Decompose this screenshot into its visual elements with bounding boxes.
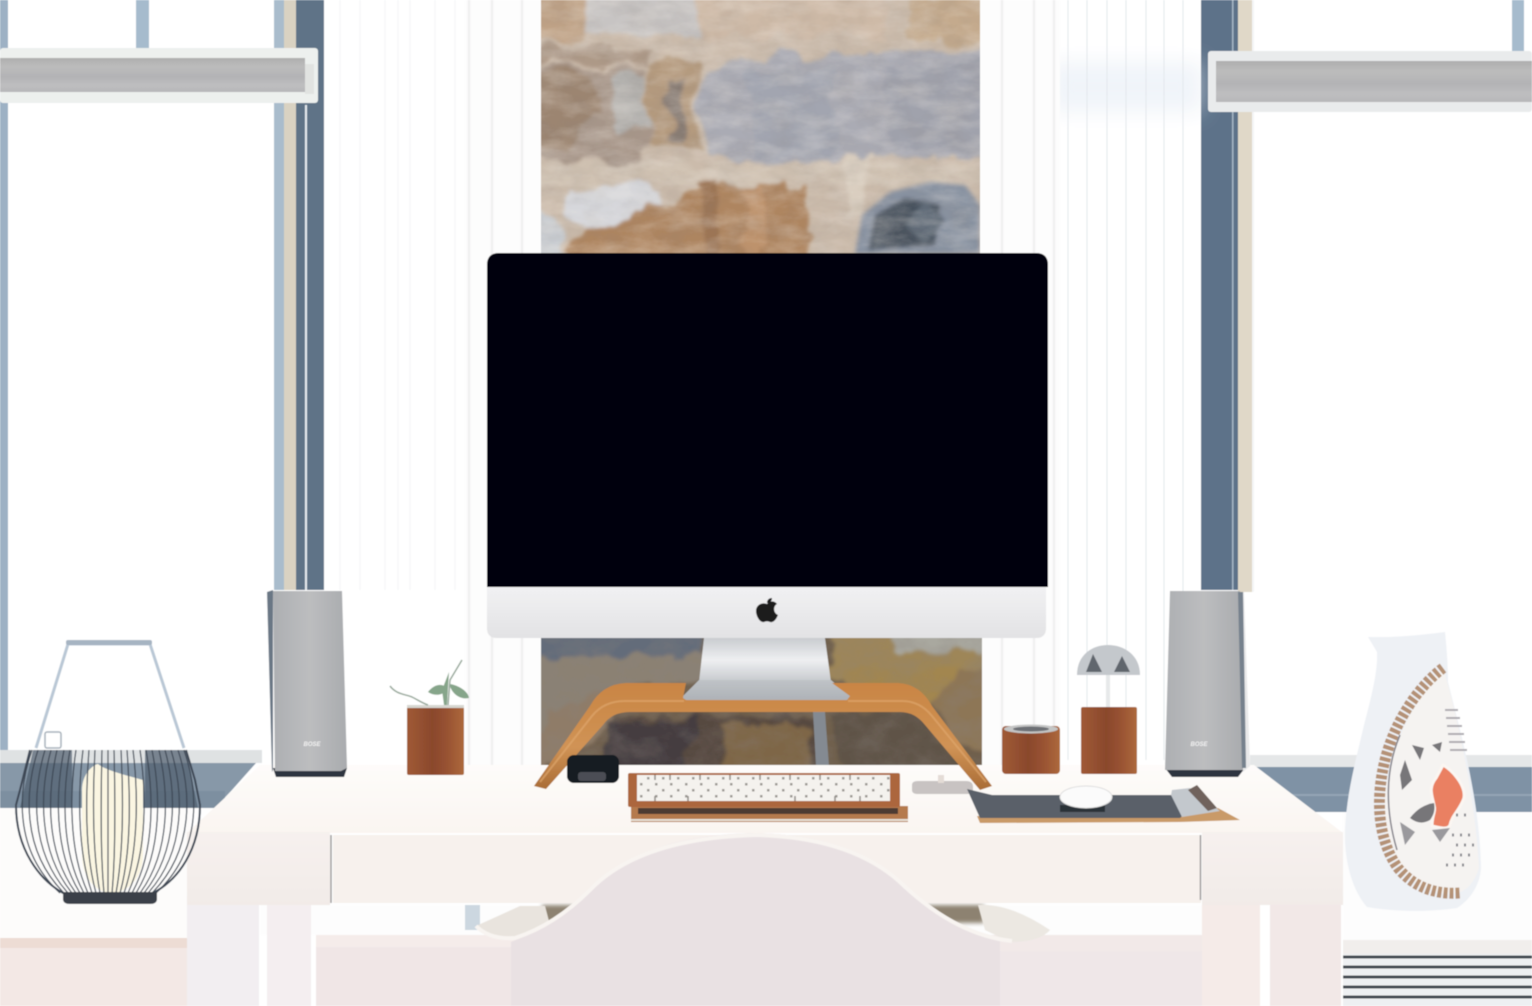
right speaker [1165, 591, 1250, 777]
chair right arm underside [978, 905, 1050, 942]
chair left arm underside [476, 906, 550, 938]
dark band seen through the cage [20, 750, 198, 808]
lantern glass outline [36, 644, 184, 748]
left roller blind [0, 48, 318, 103]
pen clip [1171, 788, 1220, 817]
wooden monitor riser [534, 683, 992, 790]
window ledge and wall below left [0, 808, 190, 1006]
desk left block [187, 832, 330, 905]
small wooden cup [1002, 724, 1060, 774]
right curtain [1068, 0, 1183, 760]
icon: apple logo [756, 598, 778, 622]
vase body [1345, 632, 1481, 911]
mouse pad with clip [967, 785, 1240, 823]
orange blob [1431, 765, 1464, 828]
monitor cable [813, 712, 829, 766]
left curtain [340, 0, 455, 590]
lantern wires [112, 750, 194, 893]
wooden tray [631, 806, 908, 822]
speaker logo: BOSE [303, 742, 321, 748]
chair [476, 833, 1050, 1006]
radiator vent [1343, 812, 1532, 1006]
lower window sill left [0, 750, 262, 808]
desk drawer [333, 835, 1201, 903]
wooden pot [407, 707, 464, 775]
desk right block [1202, 832, 1343, 905]
keys [637, 775, 890, 801]
right window frame [1201, 0, 1524, 592]
lantern base [63, 892, 157, 904]
blind glow on right curtain [1050, 62, 1202, 112]
monitor stand [683, 638, 850, 700]
tan base edge [977, 808, 1240, 823]
desk legs [187, 905, 1341, 1006]
phone dock [912, 775, 973, 794]
monitor chin [487, 587, 1046, 638]
lower window sill right [1250, 755, 1532, 812]
wire lantern [16, 640, 200, 904]
speaker logo: BOSE [1190, 742, 1208, 748]
right roller blind [1208, 51, 1532, 112]
wall columns [465, 0, 1060, 768]
pattern details [1400, 742, 1450, 845]
wooden keyboard base [628, 773, 900, 807]
plant leaves [428, 672, 469, 705]
pattern panel [1384, 668, 1479, 894]
painted vase [1345, 632, 1481, 911]
candle [82, 764, 143, 893]
lower stone wall [540, 637, 983, 766]
dark pad [967, 789, 1185, 818]
pattern band [1379, 668, 1460, 893]
mouse [1060, 786, 1112, 812]
upper stone wall [530, 0, 995, 265]
desk top surface [187, 765, 1343, 833]
dome lamp on wooden base [1077, 645, 1140, 774]
chair back [511, 833, 1000, 1006]
black puck [567, 755, 619, 783]
potted plant [390, 660, 469, 775]
left window frame [0, 0, 324, 750]
baseboard under desk [260, 905, 1210, 1006]
chair rim [476, 835, 1012, 941]
monitor [487, 253, 1048, 638]
keyboard on wooden tray [628, 773, 908, 822]
monitor screen [487, 253, 1048, 587]
desk [187, 765, 1343, 1006]
left speaker [267, 590, 347, 777]
